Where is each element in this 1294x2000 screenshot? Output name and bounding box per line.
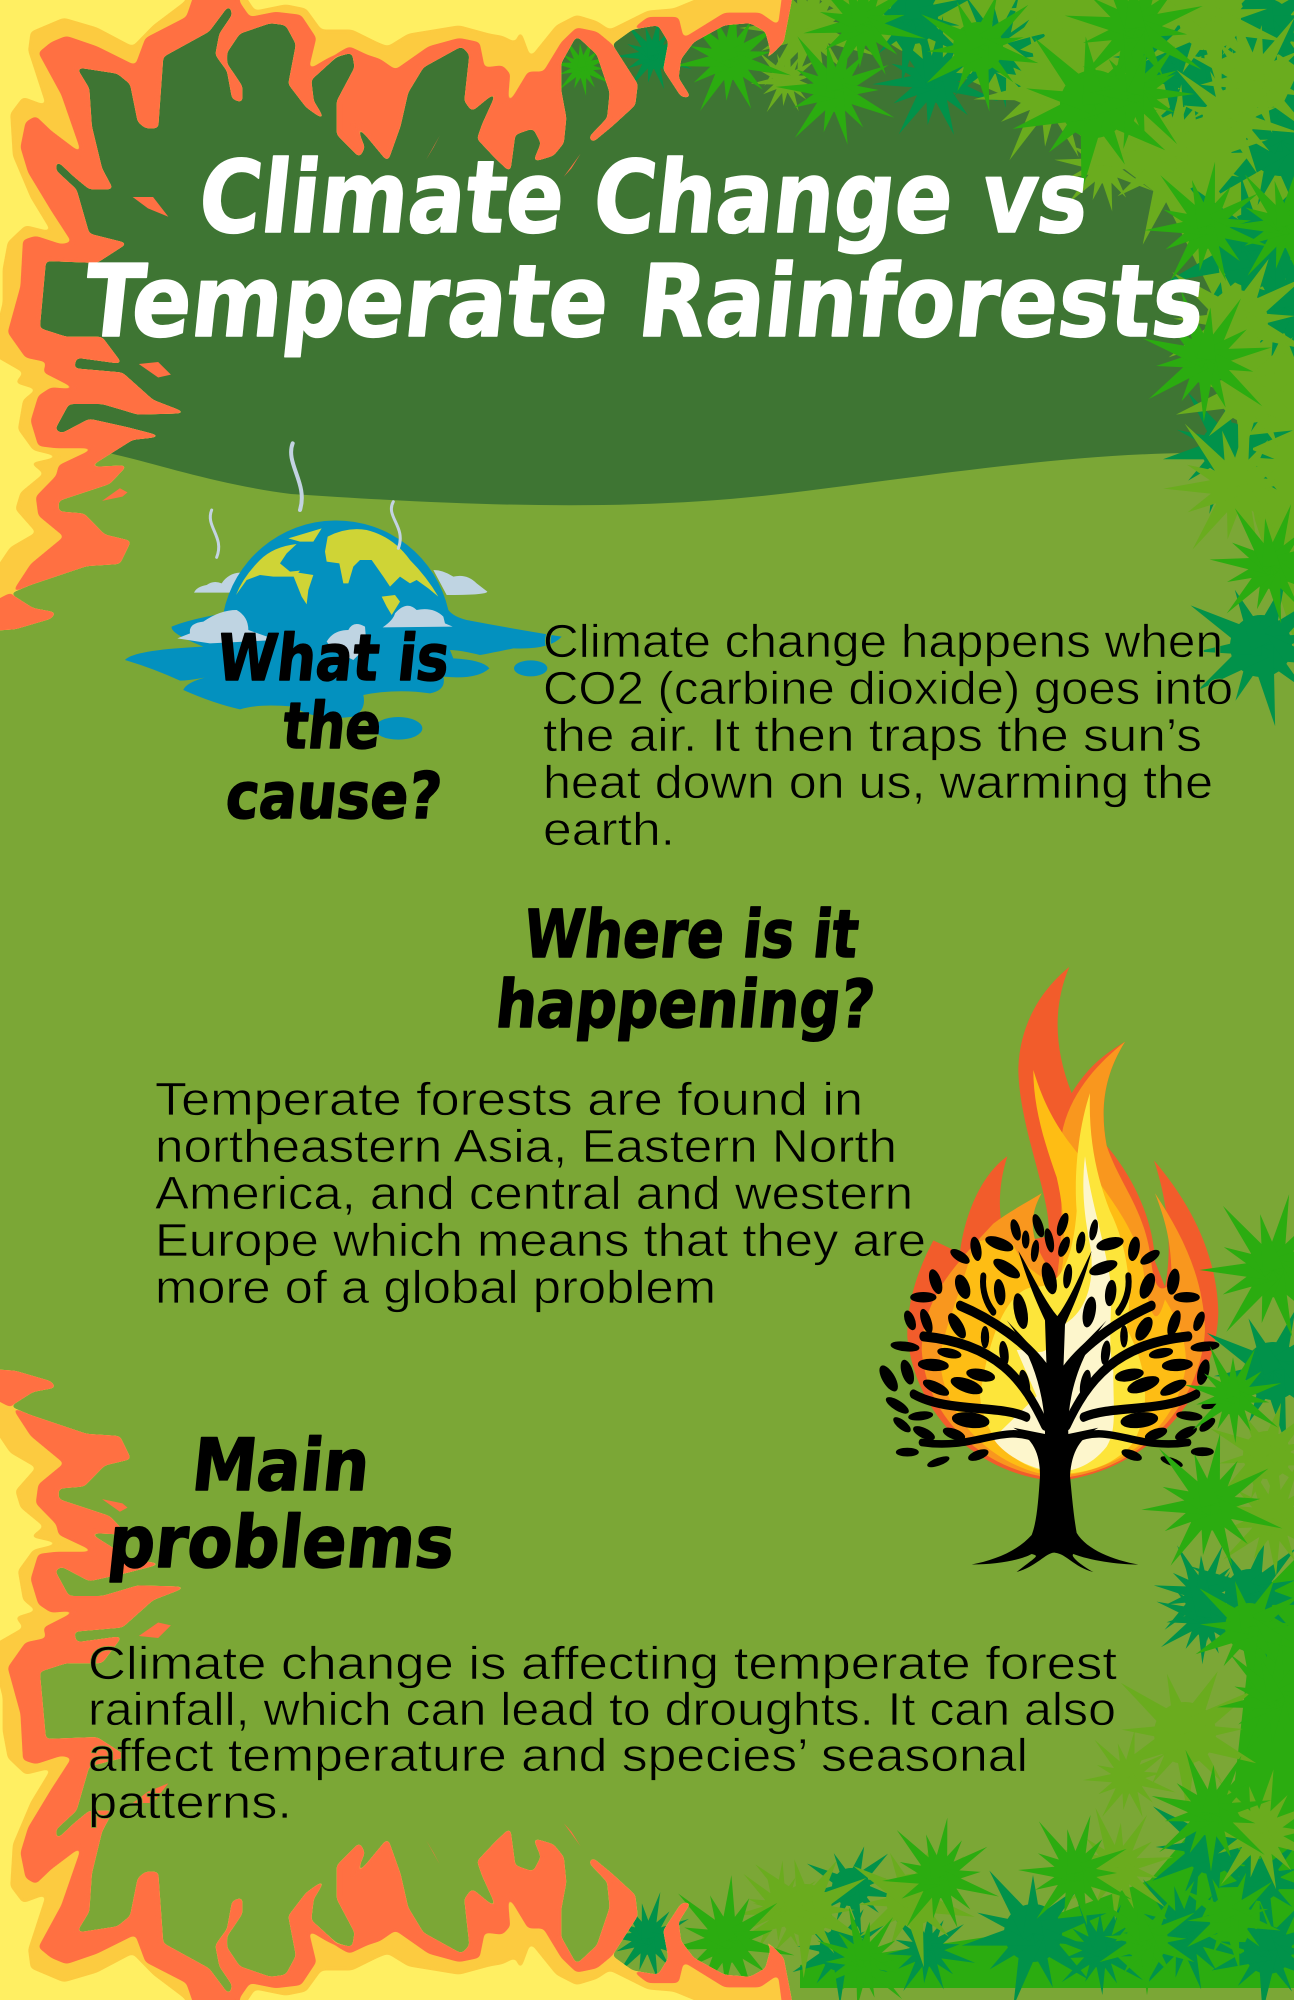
heading: where is it happening [492,896,878,1043]
text block: where: northeastern Asia, Eastern North [155,1120,897,1172]
title: Climate Change vs [193,139,1095,256]
heading: where is it happening: happening? [492,966,878,1043]
text block: cause: heat down on us, warming the [543,756,1213,808]
text block: main problems: Climate change is affecting temperate forest [88,1637,1117,1689]
text block: cause: Climate change happens when [543,615,1223,667]
heading: what is the cause: the [279,689,385,764]
text block: cause [543,615,1233,855]
text block: main problems: patterns. [88,1776,292,1828]
text block: main problems: affect temperature and species’ seasonal [88,1729,1028,1781]
heading: main problems: problems [104,1501,459,1585]
text block: where: America, and central and western [155,1167,913,1219]
text block: where [155,1073,926,1313]
foliage border: top right [542,0,1294,739]
heading: main problems [104,1424,459,1585]
text block: where: Europe which means that they are [155,1214,926,1266]
text block: main problems: rainfall, which can lead to droughts. It can also [88,1683,1116,1735]
icon: melting earth globe [125,443,562,740]
heading: main problems: Main [188,1424,374,1508]
flame border: bottom left [0,1369,792,2000]
header dark green hill [0,0,1294,505]
text block: cause: the air. It then traps the sun’s [543,709,1202,761]
text block: where: more of a global problem [155,1261,716,1313]
text block: cause: CO2 (carbine dioxide) goes into [543,662,1233,714]
icon: burning tree [877,967,1222,1572]
heading: what is the cause [213,621,453,834]
foliage border: bottom right [592,1179,1294,2000]
title [78,139,1211,360]
text block: cause: earth. [543,803,675,855]
text block: main problems [88,1637,1117,1828]
heading: what is the cause: cause? [222,759,445,834]
heading: what is the cause: What is [213,621,453,696]
text block: where: Temperate forests are found in [155,1073,863,1125]
heading: where is it happening: Where is it [520,896,862,973]
flame border: top left [0,0,792,631]
